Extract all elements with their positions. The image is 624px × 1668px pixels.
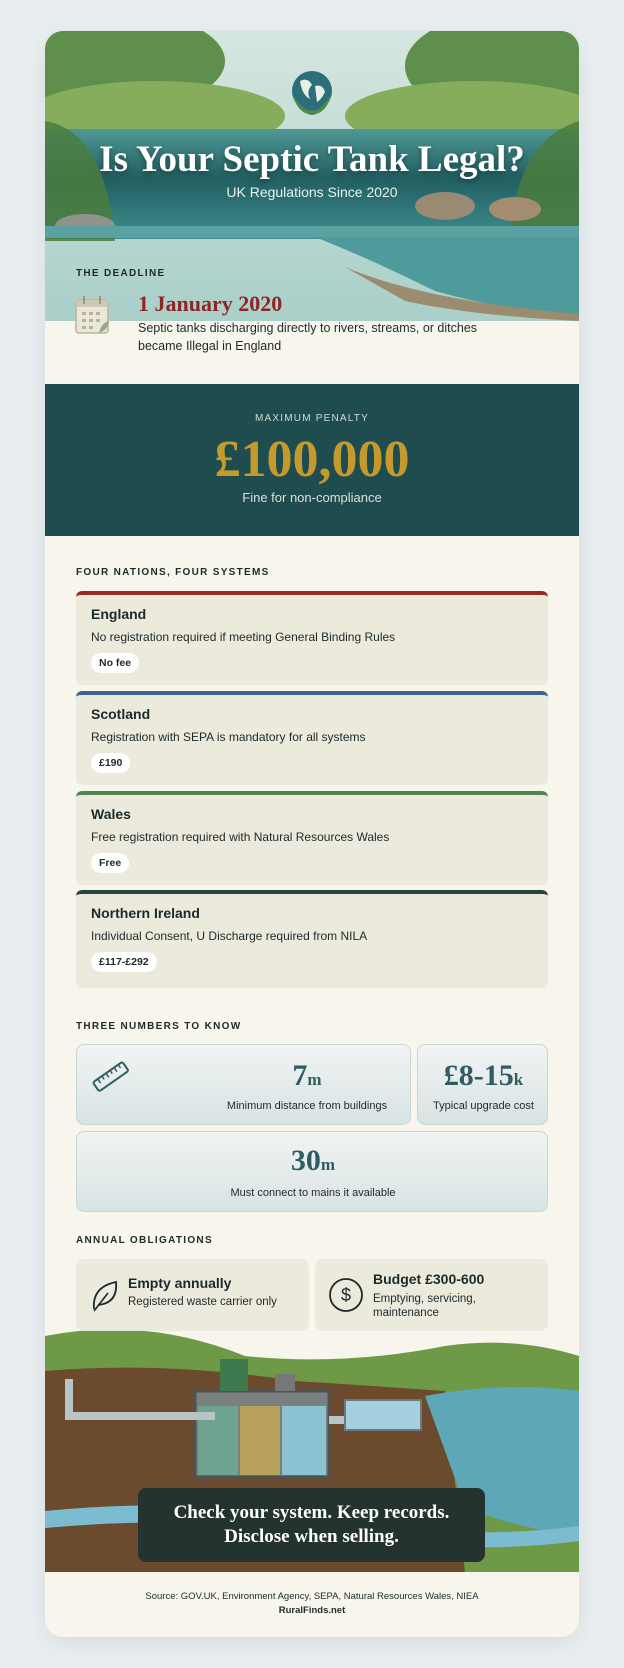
panel: Scotland: Registration with SEPA is mandatory for all systems [91,730,366,744]
stat: upgrade cost: Typical upgrade cost [433,1100,534,1112]
icon: dollar: $ [341,1285,351,1305]
heading: annual obligations: ANNUAL OBLIGATIONS [76,1235,213,1246]
footer source: RuralFinds.net [279,1605,345,1616]
penalty amount: £100,000 [214,431,410,488]
deadline section: THE DEADLINE [76,268,166,279]
panel: England: No registration required if meeting General Binding Rules [91,630,395,644]
panel: England: England [91,606,146,622]
hero illustration [45,31,579,321]
panel: maximum penalty [45,384,579,536]
stat: 7m [76,1044,411,1125]
icon: globe [292,71,332,115]
deadline text: Septic tanks discharging directly to rivers, streams, or ditches became Illegal in England [138,321,477,353]
panel: maximum penalty: MAXIMUM PENALTY [255,413,369,424]
stat: 30m [76,1131,548,1212]
stat: 7m: 7m [292,1059,322,1092]
stat: upgrade cost: £8-15k [444,1059,523,1092]
panel: England [76,591,548,685]
stat: upgrade cost [417,1044,548,1125]
callout [138,1488,485,1562]
panel: Northern Ireland [76,890,548,988]
panel: budget: Budget £300-600 [373,1271,484,1287]
icon: dollar [329,1278,363,1312]
stat: 7m: Minimum distance from buildings [227,1100,387,1112]
footer source: Source: GOV.UK, Environment Agency, SEPA, Natural Resources Wales, NIEA [145,1591,479,1602]
panel: Scotland: Scotland [91,706,150,722]
panel: maximum penalty: Fine for non-compliance [242,490,382,505]
deadline section [75,268,477,353]
illustration: septic system cross-section [45,1330,579,1572]
callout: Check your system. Keep records. [174,1502,449,1523]
callout: Disclose when selling. [224,1526,399,1547]
subtitle: UK Regulations Since 2020 [226,184,398,200]
panel: Wales [76,791,548,885]
stat: 30m: 30m [291,1144,335,1177]
panel: Northern Ireland: Individual Consent, U Discharge required from NILA [91,929,367,943]
panel: Wales: Wales [91,806,131,822]
heading: three numbers: THREE NUMBERS TO KNOW [76,1021,241,1032]
panel: Wales: Free registration required with Natural Resources Wales [91,830,389,844]
panel: Wales: Free [99,857,121,869]
panel: Northern Ireland: £117-£292 [99,956,149,968]
panel: Northern Ireland: Northern Ireland [91,905,200,921]
stat: 30m: Must connect to mains it available [230,1187,396,1199]
panel: England: No fee [99,657,131,669]
icon: leaf [92,1280,118,1312]
icon: calendar [75,296,109,334]
panel: Scotland: £190 [99,757,122,769]
panel: empty annually: Empty annually [128,1275,231,1291]
panel: budget [315,1259,548,1331]
panel: budget: Emptying, servicing, [373,1293,476,1305]
date: 1 January 2020 [138,291,282,316]
heading: four nations: FOUR NATIONS, FOUR SYSTEMS [76,567,270,578]
panel: budget: maintenance [373,1307,439,1319]
footer source [145,1591,479,1616]
panel: empty annually: Registered waste carrier only [128,1296,277,1308]
panel: empty annually [76,1259,309,1331]
title: Is Your Septic Tank Legal? [99,139,525,180]
panel: Scotland [76,691,548,785]
icon: ruler [92,1062,129,1092]
